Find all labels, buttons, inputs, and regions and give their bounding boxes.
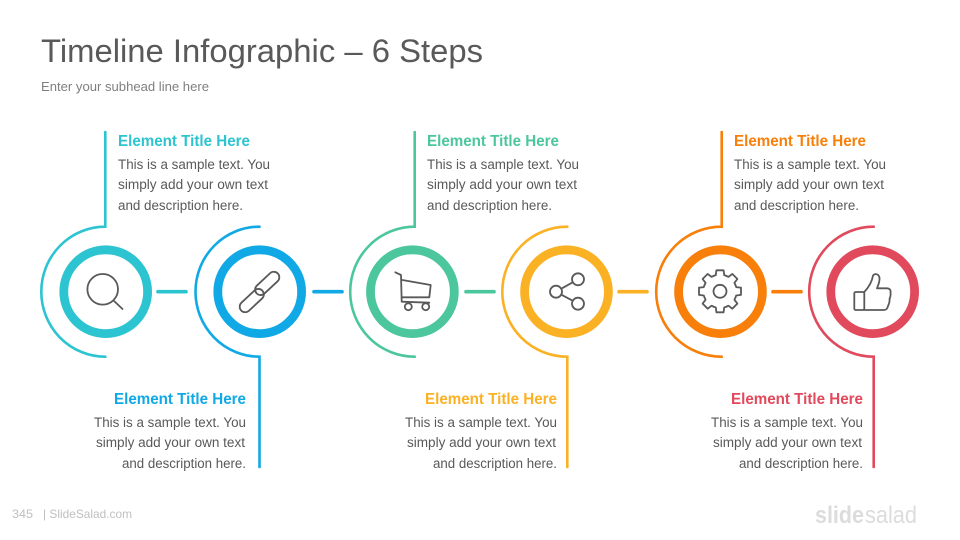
footer logo: slide (815, 502, 864, 529)
step 3 text: simply add your own text (427, 177, 577, 192)
step 2 text (94, 391, 246, 471)
step 2 ring (218, 250, 302, 334)
step 5 text: simply add your own text (734, 177, 884, 192)
step 4 ring (525, 250, 608, 334)
step 5: gear (656, 132, 886, 357)
step 2 text: This is a sample text. You (94, 415, 246, 430)
icon: thumbs up (854, 274, 891, 310)
step 5 text: This is a sample text. You (734, 157, 886, 172)
step 1 text (118, 133, 270, 213)
icon: gear (699, 270, 741, 312)
step 3 text (427, 133, 579, 213)
step 5 connector (773, 290, 801, 294)
step 3 text: This is a sample text. You (427, 157, 579, 172)
step 4 text: and description here. (433, 456, 557, 471)
step 4 text: Element Title Here (425, 391, 557, 408)
footer logo: salad (865, 502, 917, 529)
footer logo (815, 502, 917, 529)
step 4 text (405, 391, 557, 471)
step 2 text: Element Title Here (114, 391, 246, 408)
step 2: link (94, 227, 342, 471)
icon: chain link (236, 270, 283, 314)
step 3: cart (350, 132, 579, 357)
step 1 ring (64, 250, 148, 334)
step 4 text: simply add your own text (407, 435, 556, 450)
step 3 connector (466, 290, 494, 294)
step 6 text (711, 391, 863, 471)
step 6: thumbs up (711, 227, 915, 471)
icon: magnifier (87, 274, 122, 309)
step 6 text: Element Title Here (731, 391, 863, 408)
step 6 text: simply add your own text (713, 435, 862, 450)
step 4 arc and leader (502, 227, 567, 467)
footer page number and site: | SlideSalad.com (43, 507, 132, 521)
step 6 text: and description here. (739, 456, 863, 471)
step 3 text: and description here. (427, 198, 552, 213)
step 1 text: simply add your own text (118, 177, 268, 192)
step 4: share (405, 227, 647, 471)
step 2 arc and leader (196, 227, 260, 467)
step 1: search (41, 132, 270, 357)
step 5 arc and leader (656, 132, 722, 357)
step 4 connector (619, 290, 647, 294)
step 1 text: and description here. (118, 198, 243, 213)
step 6 ring (831, 250, 915, 334)
icon: share nodes (550, 273, 584, 310)
step 6 arc and leader (809, 227, 874, 467)
step 2 connector (314, 290, 342, 294)
step 5 text: and description here. (734, 198, 859, 213)
step 2 text: and description here. (122, 456, 246, 471)
icon: shopping cart (395, 272, 431, 310)
step 6 text: This is a sample text. You (711, 415, 863, 430)
step 1 arc and leader (41, 132, 105, 357)
step 1 connector (158, 290, 186, 294)
step 5 ring (679, 250, 762, 334)
step 5 text (734, 133, 886, 213)
step 3 arc and leader (350, 132, 415, 357)
footer page number and site: 345 (12, 507, 33, 521)
subhead: Enter your subhead line here (41, 79, 209, 94)
step 5 text: Element Title Here (734, 133, 866, 150)
step 2 text: simply add your own text (96, 435, 245, 450)
step 4 text: This is a sample text. You (405, 415, 557, 430)
step 1 text: Element Title Here (118, 133, 250, 150)
step 3 text: Element Title Here (427, 133, 559, 150)
step 3 ring (370, 250, 454, 334)
step 1 text: This is a sample text. You (118, 157, 270, 172)
title: Timeline Infographic – 6 Steps (41, 33, 483, 69)
